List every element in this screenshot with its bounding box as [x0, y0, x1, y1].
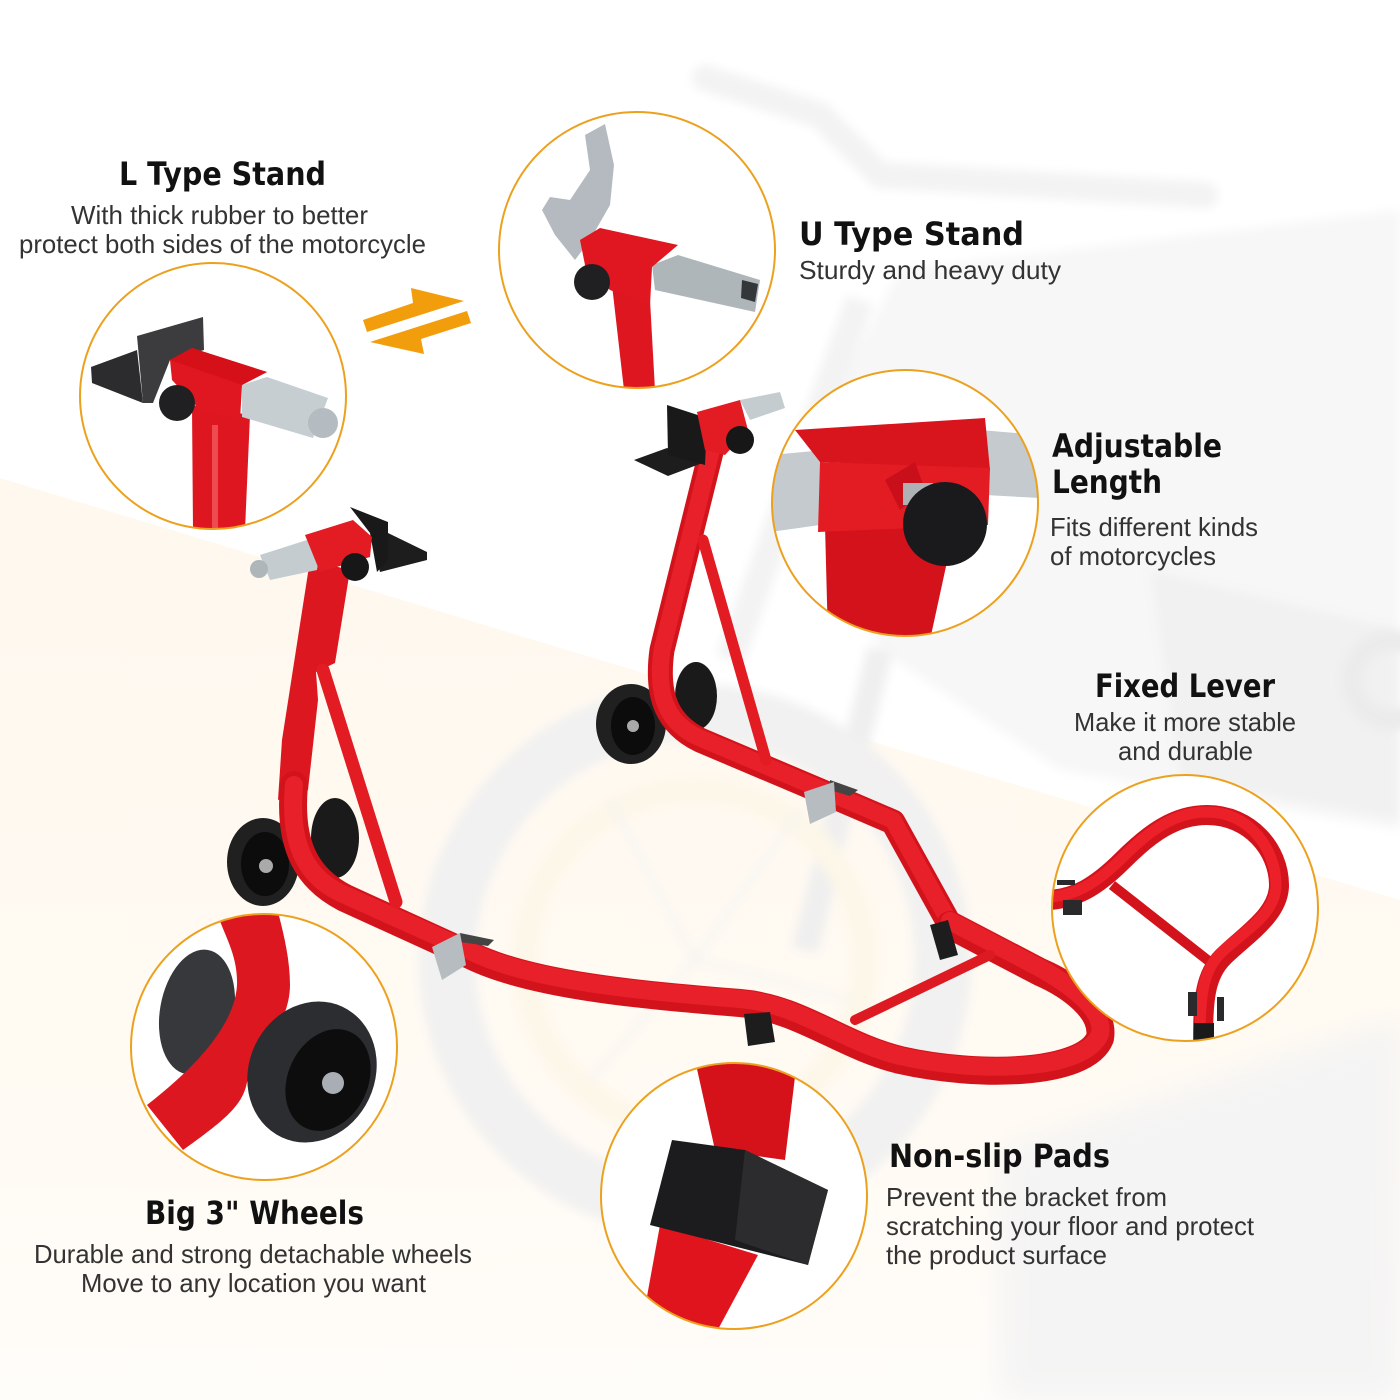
panel: adjustable length closeup: [770, 370, 1040, 640]
main product: paddock stand: [227, 392, 1100, 1071]
text: fixed lever description: [1074, 707, 1296, 766]
panel: wheels closeup: [131, 912, 400, 1180]
text: wheels description: Durable and strong detachable wheels: [34, 1239, 472, 1269]
text: L type description: [19, 200, 426, 259]
panel: L type stand closeup: [80, 263, 346, 530]
panel: non-slip pad closeup: [601, 1060, 867, 1335]
text: wheels description: Move to any location you want: [81, 1268, 427, 1298]
swap arrows: [363, 288, 471, 354]
text: fixed lever description: and durable: [1118, 736, 1253, 766]
heading: Fixed Lever: Fixed Lever: [1095, 667, 1275, 705]
text: non-slip description: scratching your floor and protect: [886, 1211, 1255, 1241]
panel: fixed lever closeup: [1050, 775, 1318, 1043]
base tube: [293, 785, 1100, 1071]
text: non-slip description: [886, 1182, 1255, 1270]
far stand head: [634, 392, 785, 476]
text: fixed lever description: Make it more stable: [1074, 707, 1296, 737]
heading: Non-slip Pads: Non-slip Pads: [889, 1137, 1110, 1175]
heading: Adjustable Length: [1052, 427, 1222, 501]
clamps and pads: [432, 780, 958, 1046]
text: wheels description: [34, 1239, 472, 1298]
far stand tube: [660, 440, 985, 945]
far stand wheels: [596, 662, 717, 764]
panel: U type stand closeup: [499, 112, 775, 390]
text: L type description: protect both sides of the motorcycle: [19, 229, 426, 259]
heading: L Type Stand: L Type Stand: [119, 155, 326, 193]
text: adjustable description: of motorcycles: [1050, 541, 1216, 571]
text: non-slip description: Prevent the bracket from: [886, 1182, 1167, 1212]
heading: Adjustable Length: Adjustable: [1052, 427, 1222, 465]
braces: [323, 670, 396, 902]
near stand wheels: [227, 798, 359, 906]
text: adjustable description: Fits different kinds: [1050, 512, 1258, 542]
text: non-slip description: the product surface: [886, 1240, 1107, 1270]
text: L type description: With thick rubber to better: [71, 200, 368, 230]
text: U type description: Sturdy and heavy duty: [799, 255, 1061, 285]
heading: Big 3 inch Wheels: Big 3" Wheels: [145, 1194, 364, 1232]
text: adjustable description: [1050, 512, 1258, 571]
heading: U Type Stand: U Type Stand: [799, 215, 1024, 253]
near stand post: [278, 560, 350, 800]
heading: Adjustable Length: Length: [1052, 463, 1162, 501]
faded motorcycle background: [447, 78, 1400, 1400]
near stand head: [250, 507, 427, 581]
